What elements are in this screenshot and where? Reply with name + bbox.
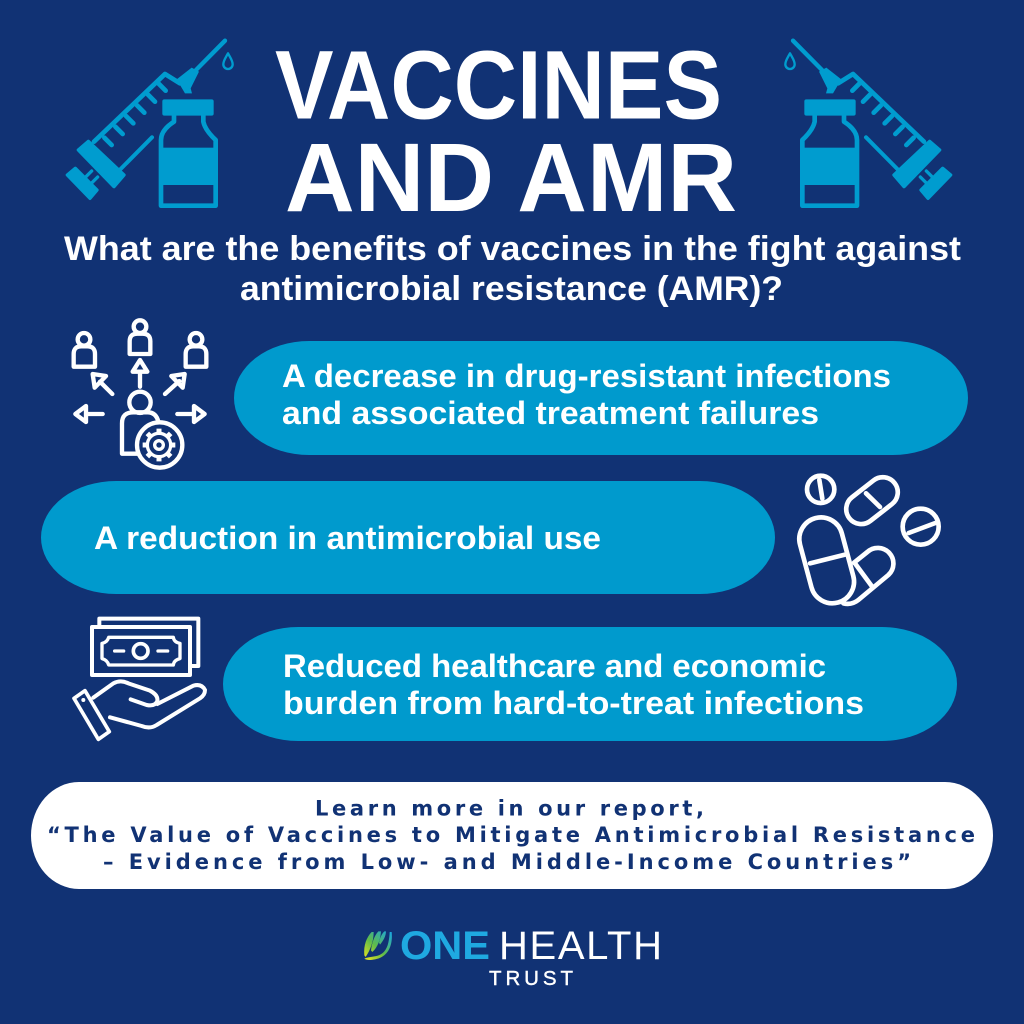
- logo: One Health Trust: HEALTH: [499, 924, 662, 968]
- icon: people spreading: [74, 320, 206, 468]
- callout: report link: Learn more in our report,: [315, 796, 704, 820]
- logo: One Health Trust: ONE: [400, 924, 490, 968]
- icon: money in hand: [74, 619, 205, 739]
- callout: report link: “The Value of Vaccines to Mitigate Antimicrobial Resistance: [47, 823, 975, 847]
- callout: report link: [31, 782, 993, 889]
- logo: One Health Trust: TRUST: [489, 967, 573, 990]
- title: VACCINES: [275, 30, 722, 140]
- panel: reduced burden: [223, 627, 957, 741]
- panel: decrease in infections: A decrease in drug-resistant infections: [282, 358, 891, 394]
- title: AND AMR: [285, 123, 737, 232]
- callout: report link: – Evidence from Low- and Middle-Income Countries”: [103, 850, 911, 874]
- subtitle: [64, 230, 961, 308]
- panel: reduction in use: A reduction in antimicrobial use: [94, 520, 601, 556]
- logo: One Health Trust: [364, 924, 662, 990]
- panel: reduced burden: burden from hard-to-treat infections: [283, 685, 864, 721]
- panel: decrease in infections: and associated treatment failures: [282, 395, 819, 431]
- icon: logo leaf: [364, 931, 392, 960]
- subtitle: antimicrobial resistance (AMR)?: [240, 270, 783, 308]
- panel: decrease in infections: [234, 341, 968, 455]
- panel: reduced burden: Reduced healthcare and economic: [283, 648, 826, 684]
- subtitle: What are the benefits of vaccines in the fight against: [64, 230, 961, 268]
- icon: pills: [794, 471, 939, 608]
- icon: syringe and vial left: [67, 41, 233, 206]
- panel: reduction in use: [41, 481, 775, 594]
- title: [275, 30, 737, 232]
- icon: syringe and vial right: [785, 41, 951, 206]
